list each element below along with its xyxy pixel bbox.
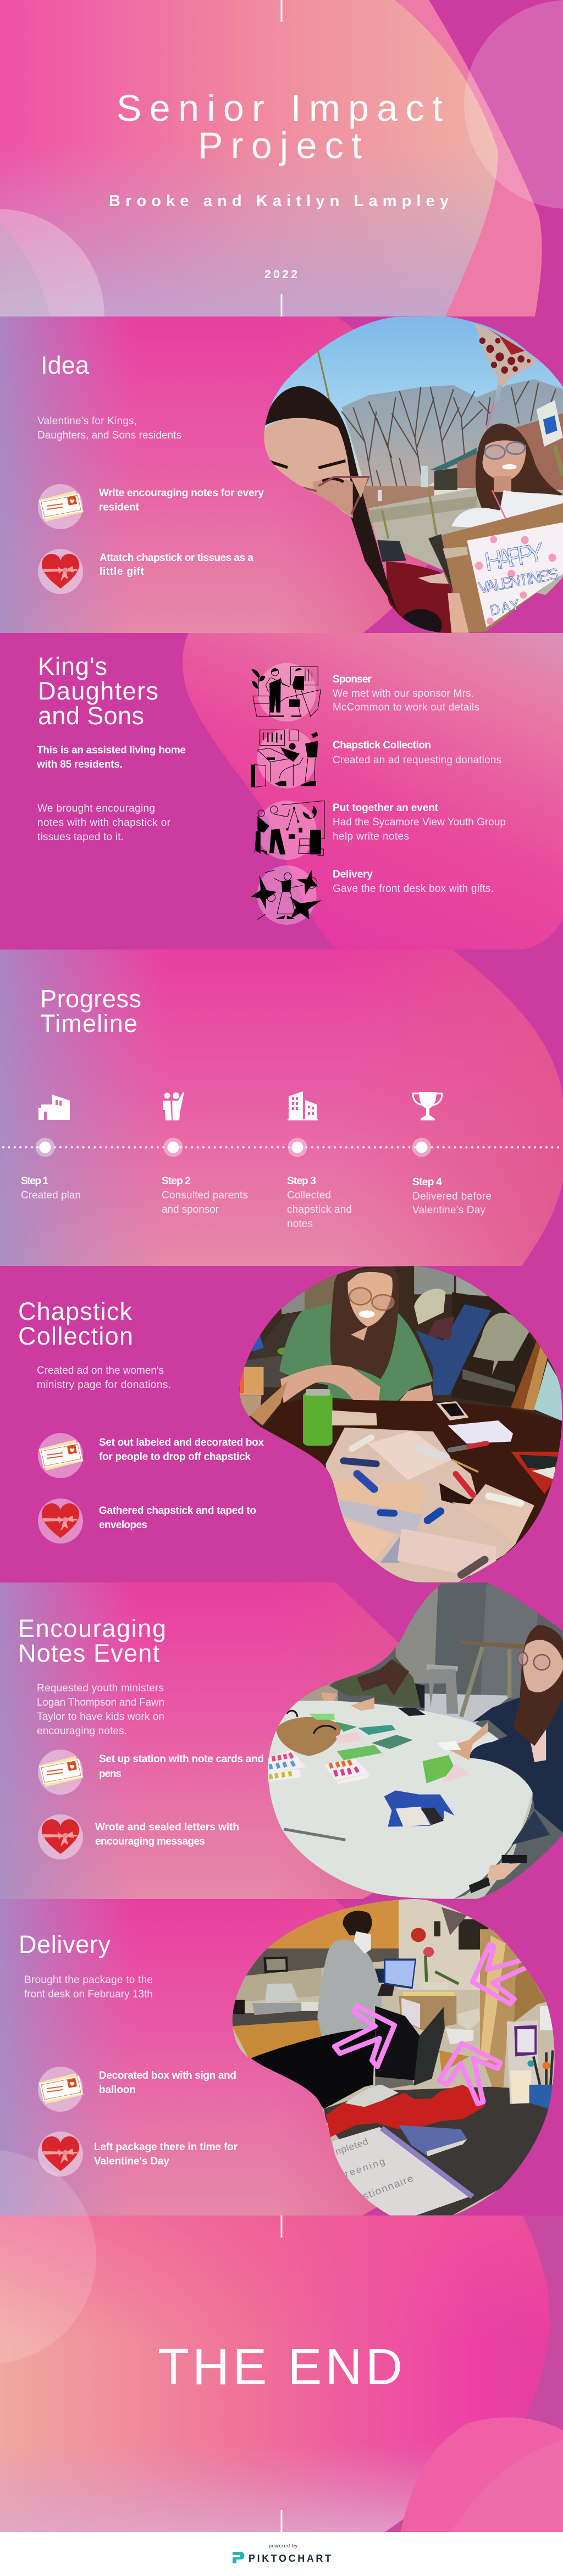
text: step 3: chapstick and [287,1204,352,1215]
heading: progress timeline: Progress [40,985,141,1013]
text: sponsor: We met with our sponsor Mrs. [333,688,474,699]
footer: powered by piktochart: powered by [269,2543,298,2549]
text: youth ministers request: Requested youth ministers [37,1683,164,1694]
text: what we brought [37,803,171,843]
heading: king's daughters and sons [38,652,158,730]
text: attach gift: little gift [100,566,145,578]
heading: chapstick collection: Chapstick [18,1297,132,1325]
heading: encouraging notes event [18,1614,166,1667]
text: delivery step: Gave the front desk box with gifts. [333,883,494,895]
text: step 3 [287,1175,352,1230]
title: the end: THE END [158,2338,402,2395]
photo: holding valentine box in parking lot [261,317,563,641]
panel: encouraging notes event [0,1583,563,1900]
text: chapstick collection [333,740,501,766]
text: assisted living description [36,745,186,770]
text: step 1 [21,1175,81,1201]
icon: piktochart logo [233,2552,244,2563]
text: wrote and sealed: encouraging messages [95,1836,205,1847]
text: wrote and sealed [95,1822,239,1847]
text: set up station: Set up station with note cards and [99,1753,264,1765]
text: write notes: Write encouraging notes for every [99,487,264,499]
heading: progress timeline: Timeline [40,1009,137,1037]
text: ad created: Created ad on the women's [37,1365,164,1376]
heading: progress timeline [40,985,141,1037]
text: what we brought: notes with with chapstick or [37,817,171,829]
icon: envelope [38,1433,84,1478]
text: write notes [99,487,264,513]
text: attach gift [100,552,253,578]
text: delivery step: Delivery [333,869,373,880]
icon: heart gift [38,2131,83,2177]
text: sponsor: Sponser [333,674,372,685]
text: step 4: Delivered before [412,1191,492,1202]
panel: the end [0,2150,563,2532]
text: wrote and sealed: Wrote and sealed letters with [95,1822,239,1833]
text: youth ministers request: Logan Thompson and Fawn [37,1697,164,1708]
text: step 1: Created plan [21,1190,81,1201]
photo: front desk with arrows: reening [343,2156,387,2179]
text: idea summary: Daughters, and Sons residents [37,430,181,441]
text: youth ministers request: Taylor to have kids work on [37,1711,164,1723]
photo: front desk with arrows: npleted [334,2136,369,2157]
illustration: sponsor handshake [251,663,321,721]
text: drop off box: Set out labeled and decorated box [99,1437,264,1448]
text: step 4 [412,1176,492,1216]
heading: king's daughters and sons: and Sons [38,702,144,730]
text: gathered chapstick: envelopes [99,1519,147,1531]
panel: king's daughters and sons [0,633,563,950]
text: put together an event: help write notes [333,831,409,842]
text: brought package: front desk on February 13th [24,1989,153,2000]
text: decorated box: balloon [99,2084,136,2096]
heading: idea: Idea [41,351,90,379]
panel: chapstick collection [0,1266,563,1583]
heading: encouraging notes event: Encouraging [18,1614,166,1642]
title: Senior Impact [117,87,443,129]
text: brought package [24,1974,153,2000]
text: put together an event [333,802,506,842]
text: idea summary: Valentine's for Kings, [37,415,137,427]
text: youth ministers request: encouraging notes. [37,1725,127,1737]
icon: envelope [38,2067,84,2112]
title: Project [198,125,362,166]
text: left package: Left package there in time for [94,2141,238,2153]
heading: king's daughters and sons: Daughters [38,677,158,705]
text: step 2: and sponsor [162,1204,219,1215]
photo: holding valentine box in parking lot: DAY [489,597,521,619]
icon: heart gift [38,1498,83,1544]
subtitle: authors: Brooke and Kaitlyn Lampley [109,192,449,210]
text: step 2: Step 2 [162,1175,191,1187]
text: drop off box: for people to drop off chapstick [99,1451,251,1463]
text: attach gift: Attatch chapstick or tissues as a [100,552,253,564]
icon: heart gift [38,549,83,594]
photo: taping chapstick to envelopes [233,1266,563,1583]
panel: delivery [0,1899,563,2216]
title [117,87,443,166]
photo: front desk with arrows [228,1899,563,2216]
icon: house [38,1095,70,1120]
photo: front desk with arrows: stionnaire [361,2173,415,2202]
footer: powered by piktochart: PIKTOCHART [249,2553,331,2564]
text: idea summary [37,415,181,441]
heading: delivery: Delivery [19,1930,111,1958]
year: 2022 [264,268,297,281]
drawn arrows [334,1945,534,2104]
text: write notes: resident [99,502,140,513]
text: step 1: Step 1 [21,1175,48,1187]
text: sponsor [333,674,479,713]
text: left package: Valentine's Day [94,2156,169,2167]
timeline line with markers [3,1137,563,1157]
text: assisted living description: with 85 residents. [36,759,123,770]
text: chapstick collection: Chapstick Collection [333,740,431,751]
text: youth ministers request [37,1683,164,1737]
photo: holding valentine box in parking lot: HAPPY [482,537,546,577]
icon: trophy [413,1092,442,1120]
text: what we brought: tissues taped to it. [37,831,124,843]
illustration: delivery with stars [251,865,322,925]
text: decorated box [99,2070,236,2096]
text: set up station [99,1753,264,1780]
icon: office buildings [288,1091,318,1120]
heading: encouraging notes event: Notes Event [18,1639,159,1667]
text: assisted living description: This is an assisted living home [37,745,186,756]
text: drop off box [99,1437,264,1463]
text: step 2: Consulted parents [162,1190,248,1201]
text: sponsor: McCommon to work out details [333,702,479,713]
text: what we brought: We brought encouraging [37,803,155,814]
heading: chapstick collection: Collection [18,1322,133,1350]
icon: envelope [38,1750,84,1795]
panel: idea [0,317,563,641]
text: step 4: Step 4 [412,1176,442,1188]
icon: people waving [163,1092,184,1120]
text: put together an event: Put together an event [333,802,439,814]
panel: progress timeline [0,950,563,1266]
text: put together an event: Had the Sycamore View Youth Group [333,817,506,828]
text: step 4: Valentine's Day [412,1204,486,1216]
photo: students writing notes at table [261,1583,563,1900]
text: step 3: notes [287,1218,313,1230]
text: set up station: pens [99,1768,122,1780]
icon: heart gift [38,1814,83,1859]
text: left package [94,2141,238,2167]
text: decorated box: Decorated box with sign and [99,2070,236,2081]
text: step 2 [162,1175,248,1215]
heading: chapstick collection [18,1297,133,1350]
text: step 3: Collected [287,1190,331,1201]
icon: envelope [38,484,84,529]
text: chapstick collection: Created an ad requesting donations [333,754,501,766]
text: gathered chapstick: Gathered chapstick and taped to [99,1505,256,1517]
illustration: control desk team [251,729,318,789]
text: delivery step [333,869,494,895]
heading: king's daughters and sons: King's [38,652,107,680]
panel: title cover [0,0,563,423]
illustration: event planning chart [255,801,324,860]
text: ad created [37,1365,171,1391]
text: ad created: ministry page for donations. [37,1379,171,1391]
text: brought package: Brought the package to the [24,1974,153,1986]
text: step 3: Step 3 [287,1175,316,1187]
text: gathered chapstick [99,1505,256,1531]
footer: powered by piktochart [0,2532,563,2576]
photo: holding valentine box in parking lot: VALENTINE'S [477,565,560,597]
